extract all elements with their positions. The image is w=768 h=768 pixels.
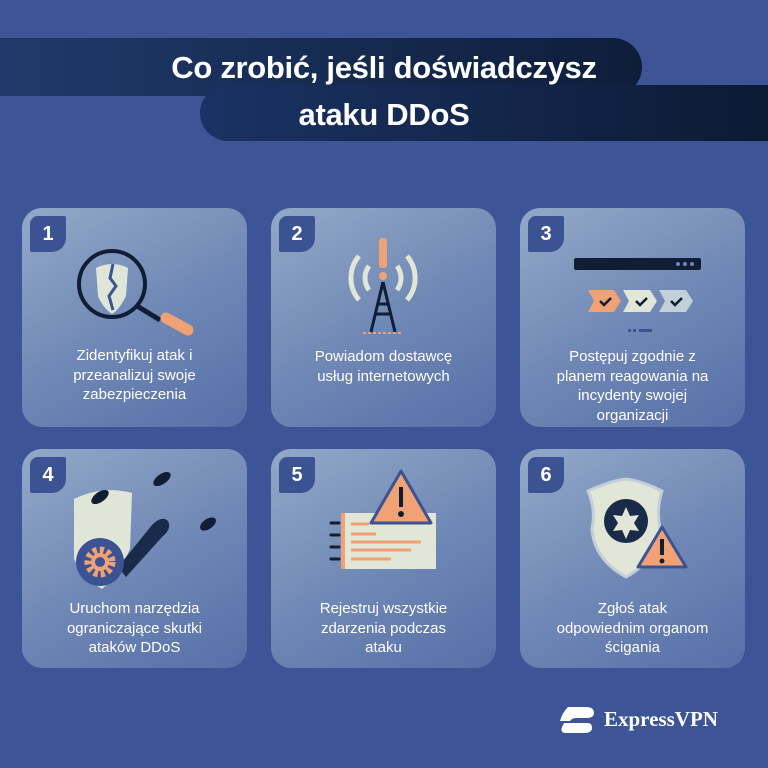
- number 6: [528, 457, 564, 493]
- text 3: [557, 348, 708, 424]
- icon: antenna tower: [348, 238, 418, 334]
- text 6: odpowiednim organom: [557, 620, 708, 636]
- text 1: Zidentyfikuj atak i: [77, 347, 192, 364]
- text 2: [315, 348, 452, 384]
- text 5: ataku: [365, 639, 402, 656]
- title: ataku DDoS: [298, 97, 469, 132]
- text 1: zabezpieczenia: [83, 386, 186, 403]
- text 5: Rejestruj wszystkie: [320, 600, 447, 617]
- icon: log with warning: [330, 469, 436, 569]
- title: [171, 50, 597, 132]
- number 2: 2: [291, 223, 303, 245]
- text 5: [320, 600, 447, 656]
- text 3: Postępuj zgodnie z: [569, 348, 696, 365]
- icon: logo mark: [560, 707, 594, 733]
- panel: step 6: [520, 449, 745, 668]
- text 1: [73, 347, 196, 403]
- text 2: usług internetowych: [317, 368, 450, 384]
- number 4: 4: [42, 464, 54, 486]
- text 5: zdarzenia podczas: [321, 620, 446, 636]
- number 3: 3: [540, 223, 552, 245]
- panel: step 4: [22, 449, 247, 668]
- number 4: [30, 457, 66, 493]
- number 3: [528, 216, 564, 252]
- text 6: Zgłoś atak: [598, 600, 667, 617]
- logo: ExpressVPN: [560, 707, 718, 733]
- title: Co zrobić, jeśli doświadczysz: [171, 50, 597, 85]
- number 1: 1: [42, 223, 54, 245]
- icon: shield with missiles and gear: [74, 472, 216, 589]
- title bar bottom: [200, 85, 768, 141]
- text 4: [67, 600, 202, 656]
- text 3: planem reagowania na: [557, 368, 708, 384]
- panel: step 3: [520, 208, 745, 427]
- number 2: [279, 216, 315, 252]
- text 4: ataków DDoS: [89, 639, 180, 656]
- number 6: 6: [540, 464, 552, 486]
- text 3: organizacji: [597, 406, 668, 424]
- panel: step 2: [271, 208, 496, 427]
- icon: magnifier with cracked shield: [77, 249, 194, 336]
- logo text: ExpressVPN: [604, 707, 718, 731]
- text 2: Powiadom dostawcę: [315, 348, 452, 365]
- text 1: przeanalizuj swoje: [73, 366, 196, 384]
- text 3: incydenty swojej: [578, 387, 687, 404]
- text 4: Uruchom narzędzia: [69, 600, 200, 617]
- number 5: [279, 457, 315, 493]
- text 4: ograniczające skutki: [67, 620, 202, 636]
- number 1: [30, 216, 66, 252]
- panel: step 5: [271, 449, 496, 668]
- title bar top: [0, 38, 642, 96]
- panel: step 1: [22, 208, 247, 427]
- icon: police badge with warning: [586, 478, 688, 579]
- text 6: ścigania: [605, 639, 660, 656]
- icon: plan checklist: [574, 258, 701, 332]
- number 5: 5: [291, 464, 303, 486]
- text 6: [557, 600, 708, 656]
